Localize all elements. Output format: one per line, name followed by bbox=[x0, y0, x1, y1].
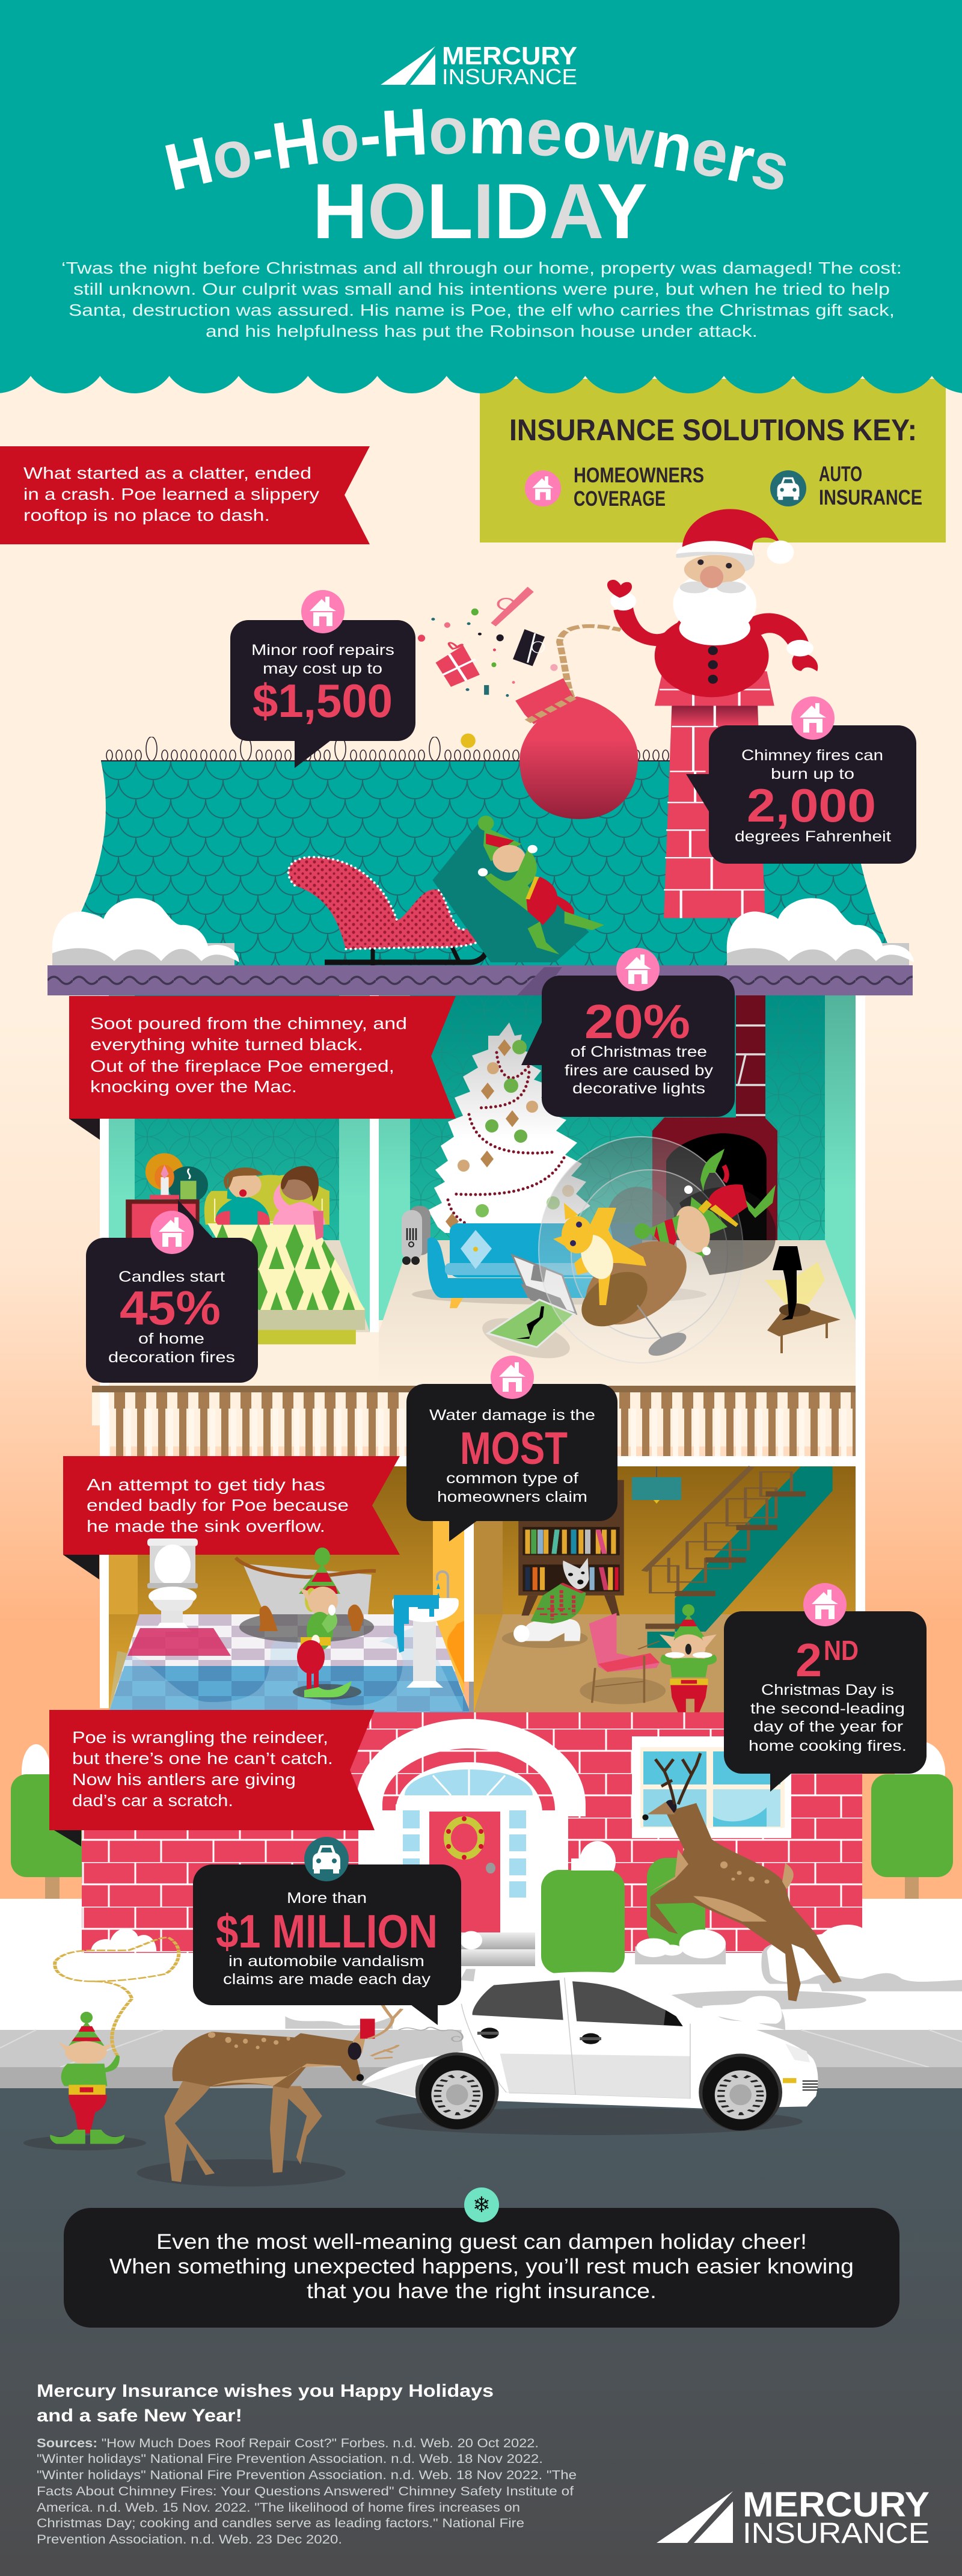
bubble: auto vandalism: $1 MILLION bbox=[216, 1905, 438, 1958]
red banner: reindeer: but there’s one he can’t catch. bbox=[72, 1749, 333, 1768]
bubble: Christmas tree fires: decorative lights bbox=[572, 1080, 705, 1097]
bubble: auto vandalism: claims are made each day bbox=[223, 1971, 431, 1988]
bubble: chimney fires: degrees Fahrenheit bbox=[735, 828, 891, 845]
nightstand with candle bbox=[126, 1153, 208, 1240]
bubble: auto vandalism: in automobile vandalism bbox=[228, 1953, 424, 1970]
closing message panel: Even the most well-meaning guest can dampen holiday cheer! bbox=[156, 2230, 807, 2254]
logo: footer Mercury Insurance bbox=[657, 2485, 930, 2550]
bubble: roof repairs bbox=[230, 590, 415, 768]
front door with arch and wreath bbox=[356, 1719, 586, 1966]
upper floor walls and left bedroom bbox=[109, 995, 856, 1386]
Santa bbox=[607, 509, 818, 697]
bubble: cooking fires: day of the year for bbox=[753, 1718, 903, 1735]
red banner: reindeer: Poe is wrangling the reindeer, bbox=[72, 1728, 328, 1747]
bookcase with books bbox=[518, 1480, 624, 1615]
bubble: candles: Candles start bbox=[118, 1268, 225, 1285]
elf on roof bbox=[432, 816, 604, 962]
bubble: cooking fires: ND bbox=[824, 1635, 859, 1666]
bed quilt triangles bbox=[207, 1223, 365, 1310]
standing reindeer scratching car bbox=[137, 2001, 402, 2186]
red banner: sink bbox=[63, 1456, 400, 1579]
snow mounds bbox=[91, 1925, 962, 2030]
sources: Sources: "How Much Does Roof Repair Cost?" Forbes. n.d. Web. 20 Oct 2022. bbox=[37, 2436, 539, 2450]
balcony railing bbox=[92, 1386, 856, 1467]
intro paragraph: ‘Twas the night before Christmas and all through our home, property was damaged! The cost: bbox=[61, 259, 902, 277]
bubble: water damage: homeowners claim bbox=[437, 1489, 587, 1505]
closing message panel bbox=[64, 2187, 899, 2328]
laptop bbox=[478, 1255, 576, 1366]
red banner: reindeer: Now his antlers are giving bbox=[72, 1770, 296, 1789]
red banner: clatter: What started as a clatter, ended bbox=[23, 464, 311, 482]
bubble: candles bbox=[86, 1200, 258, 1383]
overflowing sink bbox=[392, 1572, 459, 1688]
fireplace and chimney interior bbox=[652, 995, 777, 1240]
bushes bbox=[541, 1841, 705, 1974]
bubble: water damage: Water damage is the bbox=[429, 1407, 595, 1424]
red banner: soot bbox=[69, 996, 456, 1140]
holiday wishes: and a safe New Year! bbox=[37, 2406, 242, 2426]
key panel contents: AUTO bbox=[819, 463, 862, 486]
red banner: soot: everything white turned black. bbox=[90, 1035, 363, 1054]
red banner: sink: he made the sink overflow. bbox=[87, 1517, 325, 1535]
intro paragraph: and his helpfulness has put the Robinson house under attack. bbox=[206, 322, 758, 340]
motion circle bbox=[539, 1137, 776, 1363]
insurance solutions key backdrop bbox=[480, 379, 946, 543]
gift sack and spilled presents bbox=[418, 587, 638, 819]
holiday wishes bbox=[37, 2381, 494, 2426]
bubble: auto vandalism: More than bbox=[287, 1890, 367, 1907]
bubble: candles: decoration fires bbox=[108, 1349, 235, 1366]
bubble: roof repairs: $1,500 bbox=[253, 674, 393, 727]
bubble: chimney fires: 2,000 bbox=[747, 779, 876, 832]
intro paragraph: still unknown. Our culprit was small and his intentions were pure, but when he tried to help bbox=[73, 280, 890, 298]
sources bbox=[37, 2436, 577, 2547]
red banner: reindeer: dad’s car a scratch. bbox=[72, 1791, 233, 1810]
bubble: cooking fires: Christmas Day is bbox=[761, 1682, 894, 1698]
bubble: roof repairs: may cost up to bbox=[263, 660, 382, 677]
roof bbox=[48, 737, 902, 974]
elf in bathroom bbox=[293, 1548, 361, 1700]
couple in bed bbox=[215, 1166, 325, 1240]
lower floor living room walls and floor bbox=[464, 1466, 856, 1712]
title: HOLIDAY: HOLIDAY bbox=[313, 167, 648, 255]
bubble: chimney fires bbox=[686, 696, 916, 864]
trees bbox=[11, 1741, 953, 1955]
red banner: reindeer bbox=[49, 1710, 375, 1846]
key panel contents bbox=[509, 413, 922, 511]
red banner: sink: An attempt to get tidy has bbox=[87, 1475, 325, 1494]
bubble: chimney fires: Chimney fires can bbox=[741, 747, 883, 764]
red banner: soot: Soot poured from the chimney, and bbox=[90, 1014, 407, 1033]
brick facade bbox=[82, 1712, 862, 1953]
clawfoot tub bbox=[236, 1558, 376, 1643]
bubble: Christmas tree fires: fires are caused by bbox=[565, 1062, 714, 1079]
husky in sweater bbox=[502, 1558, 589, 1648]
toilet bbox=[147, 1539, 198, 1632]
bubble: auto vandalism bbox=[193, 1837, 461, 2025]
logo: footer Mercury Insurance: INSURANCE bbox=[743, 2518, 930, 2550]
sleigh bbox=[289, 857, 494, 965]
pink chair bbox=[580, 1613, 666, 1704]
staircase bbox=[644, 1466, 833, 1648]
logo: Mercury Insurance: MERCURY bbox=[442, 41, 577, 70]
bedroom bed and quilt bbox=[204, 1175, 365, 1344]
intro paragraph bbox=[61, 259, 902, 340]
page background bbox=[0, 0, 962, 1899]
title: Ho-Ho-Homeowners arc bbox=[165, 109, 786, 190]
white ground, sidewalk, curb and road bbox=[0, 1899, 962, 2576]
bubble: cooking fires: the second-leading bbox=[750, 1700, 905, 1717]
closing message panel: that you have the right insurance. bbox=[307, 2279, 657, 2303]
logo: Mercury Insurance: INSURANCE bbox=[442, 64, 577, 89]
reindeer antlers in window bbox=[655, 1753, 700, 1804]
intro paragraph: Santa, destruction was assured. His name is Poe, the elf who carries the Christmas gift sack, bbox=[69, 301, 895, 319]
leg lamp on side table bbox=[765, 1246, 841, 1353]
bubble: Christmas tree fires: of Christmas tree bbox=[571, 1044, 707, 1060]
bubble: Christmas tree fires bbox=[521, 948, 735, 1117]
logo: Mercury Insurance bbox=[381, 41, 577, 89]
elf tumbling out of fireplace bbox=[634, 1149, 776, 1258]
room divider and outer columns bbox=[100, 995, 865, 1717]
upper floor right living room bbox=[379, 995, 856, 1386]
heater bbox=[402, 1206, 430, 1265]
bubble: water damage: MOST bbox=[460, 1423, 568, 1474]
window bbox=[632, 1736, 791, 1838]
bubble: cooking fires: home cooking fires. bbox=[749, 1738, 907, 1754]
red banner: clatter bbox=[0, 446, 370, 544]
key panel contents: COVERAGE bbox=[574, 487, 666, 511]
bubble: cooking fires: 2 bbox=[795, 1634, 822, 1686]
hanging lamp bbox=[632, 1466, 681, 1504]
sources: "Winter holidays" National Fire Prevention Association. n.d. Web. 18 Nov 2022. bbox=[37, 2452, 543, 2466]
logo: footer Mercury Insurance: MERCURY bbox=[743, 2485, 930, 2524]
bubble: water damage: common type of bbox=[446, 1470, 578, 1487]
bubble: chimney fires: burn up to bbox=[771, 766, 854, 782]
snow on roof bbox=[52, 898, 914, 966]
car bbox=[362, 1972, 818, 2135]
bubble: cooking fires bbox=[724, 1583, 927, 1792]
sources: "Winter holidays" National Fire Prevention Association. n.d. Web. 18 Nov 2022. "The bbox=[37, 2468, 577, 2482]
sources: Facts About Chimney Fires: Your Questions Answered" Chimney Safety Institute of bbox=[37, 2485, 574, 2498]
elf with lasso bbox=[23, 1938, 179, 2150]
sofa bbox=[412, 1223, 706, 1308]
eave bbox=[47, 965, 913, 995]
sources: Prevention Association. n.d. Web. 23 Dec 2020. bbox=[37, 2533, 342, 2547]
cat on tilted table bbox=[553, 1203, 702, 1360]
lower floor bathroom walls and floor bbox=[109, 1466, 470, 1712]
key panel contents: INSURANCE bbox=[819, 486, 922, 509]
red banner: clatter: rooftop is no place to dash. bbox=[23, 506, 270, 524]
title: Ho-Ho-Homeowners arc: Ho-Ho-Homeowners bbox=[165, 109, 786, 190]
key panel contents: INSURANCE SOLUTIONS KEY: bbox=[509, 413, 917, 447]
red banner: clatter: in a crash. Poe learned a slippery bbox=[23, 485, 319, 503]
Christmas tree bbox=[428, 1022, 590, 1233]
sources: Christmas Day; cooking and candles serve as leading factors." National Fire bbox=[37, 2516, 524, 2530]
key panel contents: HOMEOWNERS bbox=[574, 464, 704, 487]
red banner: sink: ended badly for Poe because bbox=[87, 1496, 349, 1514]
sources: America. n.d. Web. 15 Nov. 2022. "The likelihood of home fires increases on bbox=[37, 2501, 520, 2515]
bubble: water damage bbox=[406, 1356, 617, 1542]
bubble: candles: of home bbox=[138, 1330, 204, 1347]
red banner: soot: knocking over the Mac. bbox=[90, 1077, 297, 1096]
bubble: roof repairs: Minor roof repairs bbox=[251, 642, 394, 659]
header panel bbox=[0, 0, 962, 393]
bubble: candles: 45% bbox=[120, 1281, 221, 1335]
chimney bbox=[655, 671, 774, 918]
closing message panel: When something unexpected happens, you’ll rest much easier knowing bbox=[109, 2255, 854, 2278]
bubble: Christmas tree fires: 20% bbox=[584, 995, 690, 1048]
red banner: soot: Out of the fireplace Poe emerged, bbox=[90, 1057, 394, 1075]
jumping reindeer bbox=[642, 1800, 842, 2001]
holiday wishes: Mercury Insurance wishes you Happy Holidays bbox=[37, 2381, 494, 2401]
closing message panel: ❄ bbox=[473, 2193, 491, 2218]
startled elf bbox=[660, 1604, 717, 1712]
bath rug bbox=[127, 1628, 231, 1656]
